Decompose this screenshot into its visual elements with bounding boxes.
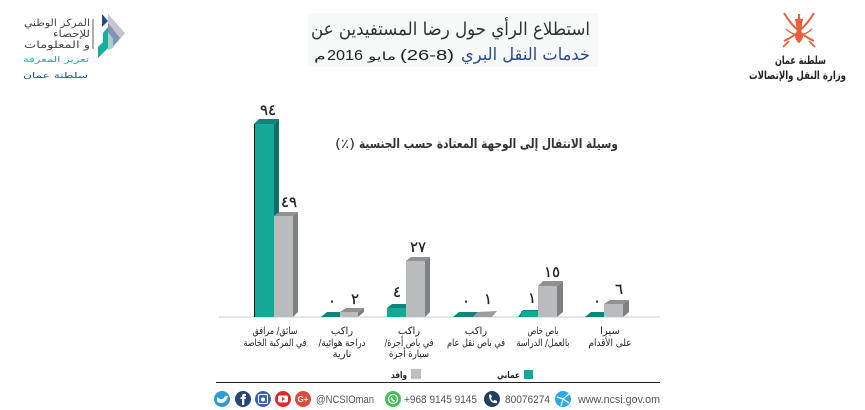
icon: instagram bbox=[255, 391, 271, 407]
toll-free number: 80076274 bbox=[505, 394, 550, 406]
bars: public bus passenger bbox=[453, 290, 497, 317]
bars: on foot: ٠ bbox=[593, 292, 601, 310]
bars: private work or school bus: ١٥ bbox=[544, 263, 560, 281]
footer contacts bbox=[214, 391, 660, 407]
label: on foot: على الأقدام bbox=[588, 336, 632, 349]
bars: taxi passenger: ٤ bbox=[393, 283, 401, 301]
chart title: وسيلة الانتقال إلى الوجهة المعتادة حسب الجنسية bbox=[359, 137, 618, 152]
logo text: centre name: المركز الوطني bbox=[24, 18, 90, 29]
label: private bus bbox=[516, 326, 570, 349]
website: www.ncsi.gov.om bbox=[577, 394, 660, 406]
icon: twitter bbox=[214, 391, 230, 407]
label: public bus: راكب bbox=[465, 326, 487, 337]
logo text: tagline: تعزيز المعرفة bbox=[23, 55, 89, 64]
handle: @NCSIOman bbox=[316, 394, 374, 406]
bars: private work or school bus: ١ bbox=[528, 289, 536, 307]
icon: phone bbox=[484, 391, 500, 407]
logo text: centre name: و المعلومات bbox=[24, 40, 90, 51]
logo: national centre for statistics and information bbox=[23, 14, 125, 80]
bars: public bus passenger: ١ bbox=[484, 290, 492, 308]
bars: private work or school bus bbox=[518, 263, 563, 317]
chart title: (٪) bbox=[335, 137, 355, 152]
label: driver or passenger: سائق/ مرافق bbox=[252, 326, 298, 337]
title line 2: date range: (26-8) bbox=[400, 47, 454, 64]
label: taxi: في باص أجرة/ bbox=[384, 336, 434, 349]
category labels bbox=[244, 326, 632, 360]
bars: bicycle or motorcycle passenger bbox=[321, 290, 364, 317]
logo text: centre name bbox=[24, 18, 90, 51]
bars: driver or passenger in private vehicle: ٩٤ bbox=[260, 101, 276, 119]
label: driver or passenger bbox=[244, 326, 307, 349]
bars: bicycle or motorcycle passenger: ٠ bbox=[328, 292, 336, 310]
label: bicycle or motorcycle: نارية bbox=[333, 349, 351, 360]
legend bbox=[391, 369, 533, 381]
bars: driver or passenger in private vehicle: ٤٩ bbox=[281, 193, 297, 211]
label: taxi: راكب bbox=[398, 326, 420, 337]
label: taxi: سيارة أجرة bbox=[389, 347, 429, 360]
icon: NCSI triangular mark bbox=[98, 14, 125, 58]
label: bicycle or motorcycle: دراجة هوائية/ bbox=[318, 338, 366, 349]
title line 2: year bbox=[314, 47, 363, 64]
icon: youtube bbox=[275, 391, 291, 407]
label: on foot: سيرا bbox=[600, 326, 620, 337]
title line 2: year: م bbox=[314, 50, 326, 63]
title line 2: month: مايو bbox=[366, 50, 396, 63]
label: public bus bbox=[447, 326, 505, 349]
icon: whatsapp bbox=[385, 391, 401, 407]
label: taxi bbox=[384, 326, 434, 360]
ministry text line 1: سلطنة عمان bbox=[775, 54, 826, 67]
label: on foot bbox=[588, 326, 632, 349]
bars: bicycle or motorcycle passenger: ٢ bbox=[351, 290, 359, 308]
bars: taxi passenger bbox=[387, 238, 430, 317]
logo text: sultanate of oman: سلطنة عمان bbox=[23, 71, 88, 80]
title line 1: استطلاع الرأي حول رضا المستفيدين عن bbox=[311, 17, 590, 40]
icon: globe bbox=[555, 391, 571, 407]
icon: google plus: G+ bbox=[298, 395, 309, 404]
label: private bus: باص خاص bbox=[528, 326, 558, 337]
bars: on foot: ٦ bbox=[615, 280, 623, 298]
logo: ministry of transport and communications bbox=[749, 13, 846, 82]
legend item: expatriate bbox=[391, 369, 421, 381]
title block bbox=[308, 13, 598, 67]
icon: google plus bbox=[295, 391, 311, 407]
bar chart bbox=[219, 101, 660, 318]
whatsapp number: +968 9145 9145 bbox=[404, 394, 477, 406]
title line 2: year: 2016 bbox=[327, 47, 363, 64]
bars: on foot bbox=[585, 280, 629, 317]
legend item: expatriate: وافد bbox=[391, 371, 407, 381]
label: private bus: بالعمل/ الدراسة bbox=[516, 338, 570, 349]
label: bicycle or motorcycle bbox=[318, 326, 366, 360]
label: bicycle or motorcycle: راكب bbox=[331, 326, 353, 337]
icon: omani emblem bbox=[783, 13, 815, 47]
logo text: centre name: للإحصاء bbox=[53, 29, 90, 40]
bars: driver or passenger in private vehicle bbox=[254, 101, 298, 317]
title line 2: service name: خدمات النقل البري bbox=[461, 45, 590, 65]
label: public bus: في باص نقل عام bbox=[447, 338, 505, 349]
bars: public bus passenger: ٠ bbox=[462, 292, 470, 310]
label: driver or passenger: في المركبة الخاصة bbox=[244, 338, 307, 349]
bars: taxi passenger: ٢٧ bbox=[410, 238, 426, 256]
legend item: omani: عماني bbox=[497, 371, 520, 381]
icon: facebook bbox=[235, 391, 251, 407]
